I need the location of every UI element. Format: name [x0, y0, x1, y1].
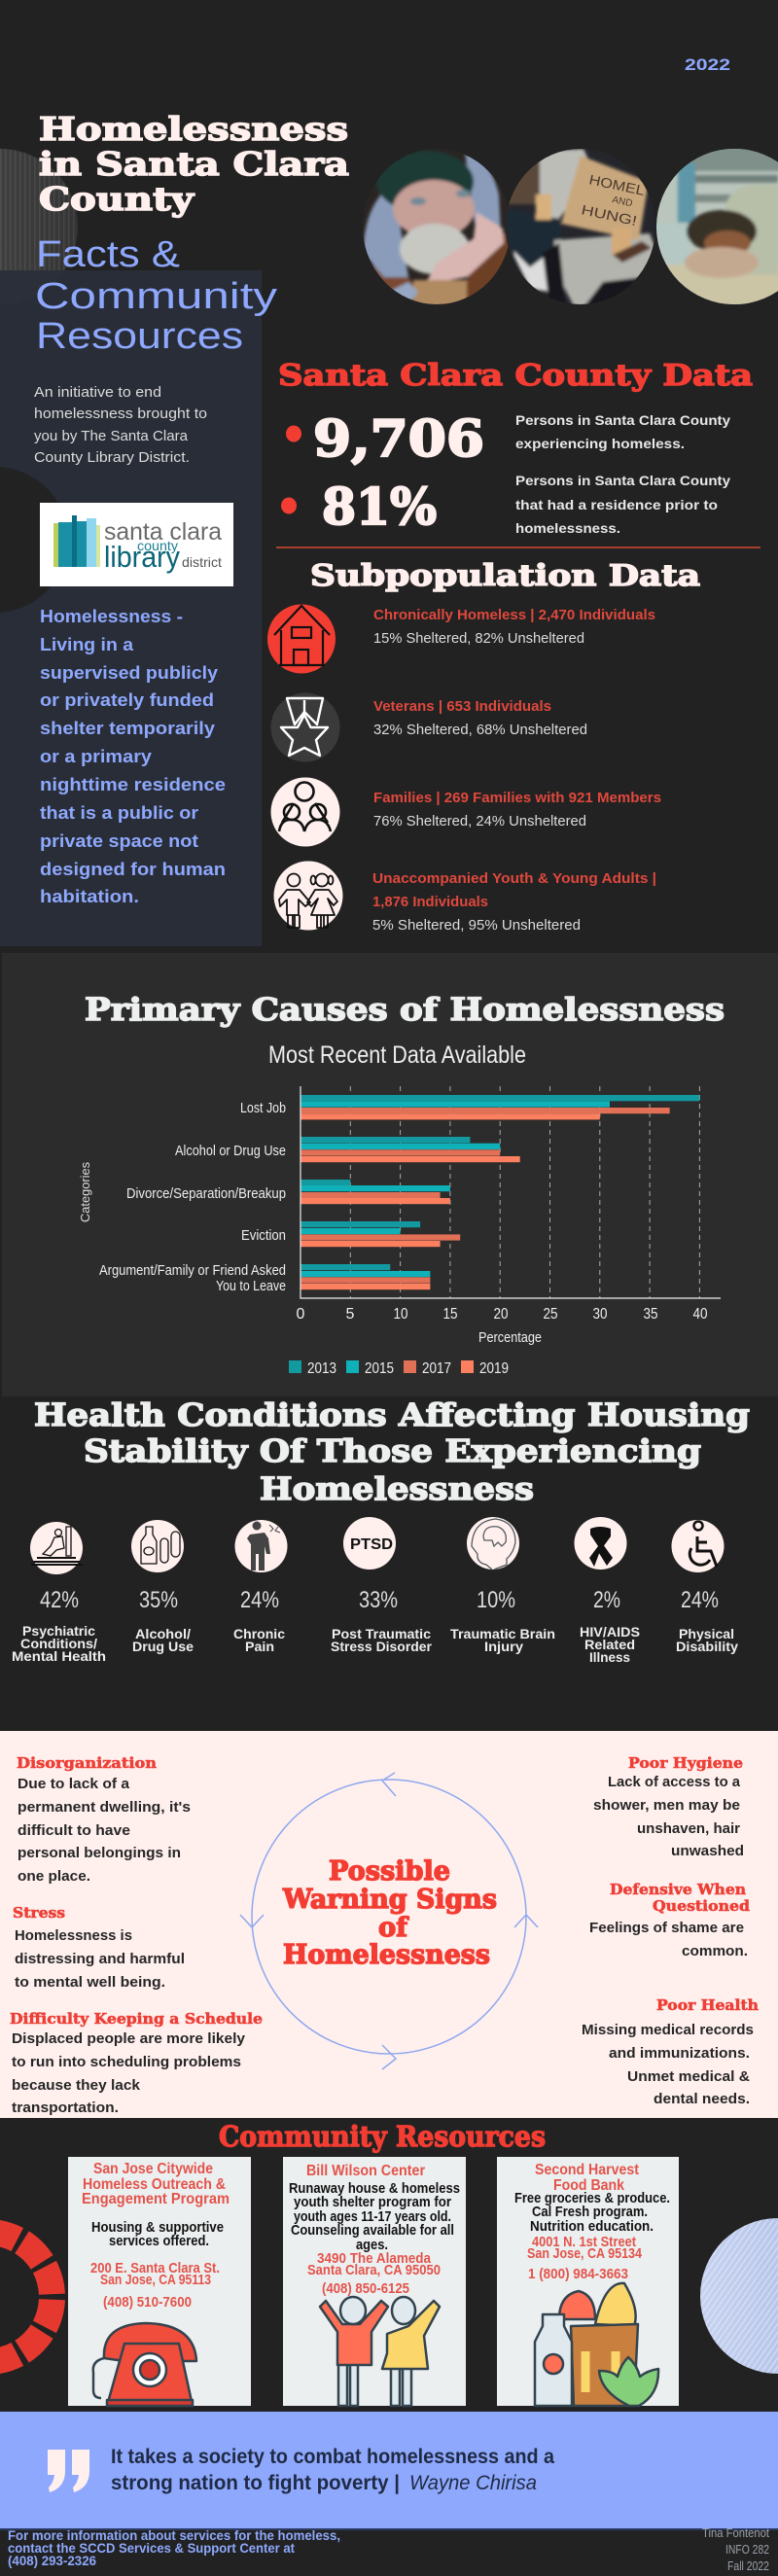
sign: poor hygiene: shower, men may be	[593, 1797, 740, 1814]
label: HIV/AIDS	[580, 1624, 640, 1640]
intro text: homelessness brought to	[34, 406, 207, 422]
icon: groceries	[535, 2283, 658, 2406]
subpopulation: veterans: 32% Sheltered, 68% Unsheltered	[373, 723, 587, 738]
photo: person sleeping	[652, 146, 778, 307]
footer contact: contact the SCCD Services & Support Center at	[8, 2540, 295, 2556]
label	[12, 1623, 106, 1664]
label: Mental Health	[12, 1648, 106, 1664]
health: chronic pain	[233, 1520, 288, 1654]
icon: bottle and pills	[131, 1520, 184, 1572]
health: PTSD	[331, 1517, 433, 1654]
sign: poor health: Unmet medical &	[627, 2068, 750, 2085]
definition of homelessness: private space not	[40, 830, 198, 851]
card description	[289, 2180, 460, 2253]
card title: Food Bank	[553, 2177, 624, 2194]
heading: Subpopulation Data: Subpopulation Data	[310, 559, 700, 593]
stat: 9,706: 9,706	[313, 410, 484, 469]
bar chart: 0	[297, 1306, 305, 1323]
label	[450, 1626, 555, 1654]
value 42%: 42%	[40, 1587, 79, 1613]
chart legend: 2019	[479, 1360, 509, 1377]
quote text: It takes a society to combat homelessness and a	[111, 2446, 554, 2468]
label: Post Traumatic	[332, 1626, 431, 1641]
footer credits: Tina Fontenot	[702, 2526, 769, 2540]
subtitle: Community	[35, 276, 277, 317]
bar chart: Categories	[78, 1162, 92, 1222]
value 35%: 35%	[139, 1587, 178, 1613]
label: Traumatic Brain	[450, 1626, 555, 1641]
health: brain injury	[450, 1517, 555, 1654]
photo: person holding sign: AND	[611, 194, 633, 209]
icon: red telephone	[93, 2323, 196, 2406]
year label: 2022	[685, 55, 730, 74]
logo: library district: santa clara	[104, 518, 222, 546]
decorative gray circle	[0, 149, 78, 304]
card: Second Harvest Food Bank	[497, 2157, 679, 2406]
sign: difficulty keeping a schedule: Difficulty Keeping a Schedule	[10, 2010, 263, 2028]
photo: person holding sign: HOMEL	[587, 171, 647, 198]
stat: 9,706	[286, 410, 730, 469]
sign: stress	[13, 1904, 185, 1991]
logo: library district: county	[137, 538, 178, 553]
definition of homelessness: Living in a	[40, 634, 134, 654]
subpopulation: unaccompanied youth	[372, 871, 656, 934]
label	[132, 1626, 194, 1654]
chart subtitle: Most Recent Data Available	[268, 1041, 526, 1069]
heading: health conditions: Stability Of Those Experiencing	[84, 1432, 701, 1469]
stat: 9,706: experiencing homeless.	[515, 436, 685, 451]
subpopulation: families	[373, 791, 661, 829]
sign: disorganization	[17, 1754, 191, 1885]
decorative red segmented ring	[0, 2233, 53, 2361]
sign: poor hygiene	[593, 1754, 744, 1859]
value 33%: 33%	[359, 1587, 398, 1613]
sign: stress: distressing and harmful	[15, 1951, 185, 1967]
chart legend: 2015	[365, 1360, 394, 1377]
center title: Warning Signs	[282, 1885, 497, 1915]
card address	[307, 2250, 441, 2297]
main title: in Santa Clara	[39, 145, 349, 183]
footer contact: (408) 293-2326	[8, 2553, 96, 2568]
bar chart: You to Leave	[216, 1278, 286, 1294]
center title: of	[378, 1913, 409, 1943]
card description: ages.	[356, 2237, 388, 2253]
decorative dark circle	[0, 467, 68, 613]
label: Pain	[245, 1639, 274, 1654]
footer contact: For more information about services for the homeless,	[8, 2527, 340, 2543]
bar chart: Alcohol or Drug Use	[175, 1143, 286, 1159]
quote text: strong nation to fight poverty |	[111, 2472, 400, 2494]
main title	[39, 110, 349, 218]
label: Disability	[676, 1639, 738, 1654]
quote banner	[0, 2412, 778, 2528]
definition of homelessness: designed for human	[40, 859, 226, 879]
card title: Engagement Program	[82, 2191, 230, 2207]
subtitle: Facts &	[36, 234, 180, 275]
panel: warning signs	[0, 1731, 778, 2118]
heading: health conditions: Health Conditions Affecting Housing	[34, 1396, 750, 1433]
sign: disorganization: one place.	[18, 1868, 90, 1885]
subpopulation: veterans: Veterans | 653 Individuals	[373, 699, 551, 715]
sign: defensive when questioned: Questioned	[653, 1897, 751, 1915]
subpopulation: veterans	[373, 699, 587, 738]
definition of homelessness: that is a public or	[40, 802, 198, 823]
definition of homelessness: or a primary	[40, 746, 153, 766]
card address	[90, 2260, 220, 2311]
label: Illness	[589, 1649, 630, 1665]
sign: difficulty keeping a schedule: because they lack	[12, 2077, 141, 2094]
label: Psychiatric	[22, 1623, 95, 1639]
bar chart: 40	[692, 1306, 708, 1323]
label: Physical	[679, 1626, 734, 1641]
icon: two children with raised arms	[320, 2297, 440, 2406]
stat: 81%: Persons in Santa Clara County	[515, 473, 730, 488]
stat: 81%: homelessness.	[515, 520, 620, 536]
card title: Bill Wilson Center	[306, 2163, 425, 2179]
sign: poor hygiene: Poor Hygiene	[628, 1754, 743, 1772]
sign: difficulty keeping a schedule: to run into scheduling problems	[12, 2054, 241, 2070]
definition of homelessness	[40, 606, 226, 906]
subpopulation: families: 76% Sheltered, 24% Unsheltered	[373, 814, 586, 829]
sign: stress: Homelessness is	[15, 1927, 132, 1944]
sign: poor health: Poor Health	[656, 1996, 759, 2014]
subpopulation: chronically homeless	[373, 608, 655, 647]
card address: (408) 850-6125	[322, 2280, 409, 2297]
sign: disorganization: permanent dwelling, it's	[18, 1799, 191, 1816]
stat: 81%: that had a residence prior to	[515, 497, 718, 512]
footer credits: Fall 2022	[727, 2559, 769, 2573]
main title: County	[39, 180, 194, 218]
label: Related	[584, 1637, 635, 1652]
photo: elderly man	[363, 150, 508, 304]
definition of homelessness: Homelessness -	[40, 606, 183, 626]
heading: community resources: Community Resources	[219, 2120, 546, 2153]
sign: stress: to mental well being.	[15, 1974, 165, 1991]
sign: poor hygiene: unshaven, hair	[637, 1820, 740, 1837]
sign: defensive when questioned: common.	[682, 1943, 748, 1959]
card description	[91, 2219, 224, 2249]
icon: house	[267, 605, 336, 673]
sign: disorganization: difficult to have	[18, 1822, 130, 1839]
icon: two children	[274, 862, 342, 930]
card description: Nutrition education.	[530, 2218, 654, 2235]
photo: person holding sign	[504, 146, 661, 307]
card address: 3490 The Alameda	[317, 2250, 432, 2267]
icon: ribbon	[574, 1517, 626, 1570]
card title: Second Harvest	[535, 2162, 640, 2178]
health: HIV/AIDS	[574, 1517, 640, 1665]
bar chart: 15	[443, 1306, 458, 1323]
sign: difficulty keeping a schedule	[10, 2010, 263, 2116]
decorative pale circle	[700, 2218, 778, 2374]
panel: causes chart	[2, 953, 778, 1396]
subpopulation: chronically homeless: Chronically Homeless | 2,470 Individuals	[373, 608, 655, 623]
label: Conditions/	[20, 1636, 97, 1651]
icon: PTSD badge: PTSD	[350, 1536, 393, 1553]
quote text: Wayne Chirisa	[409, 2472, 537, 2494]
sign: poor hygiene: unwashed	[671, 1843, 744, 1859]
intro text	[34, 384, 207, 466]
photo: person holding sign: HUNG!	[580, 201, 638, 229]
card description: Cal Fresh program.	[532, 2204, 648, 2220]
card title	[82, 2161, 230, 2207]
bar chart: Lost Job	[240, 1100, 286, 1116]
center title: Possible	[329, 1856, 450, 1887]
definition of homelessness: habitation.	[40, 886, 139, 906]
subpopulation: families: Families | 269 Families with 921 Members	[373, 791, 661, 806]
bar chart: 25	[543, 1306, 558, 1323]
card title: San Jose Citywide	[93, 2161, 213, 2177]
card: Bill Wilson Center	[283, 2157, 466, 2406]
card title	[535, 2162, 640, 2194]
card description: Housing & supportive	[91, 2219, 224, 2236]
sign: poor health: and immunizations.	[609, 2045, 750, 2062]
card address: San Jose, CA 95113	[100, 2272, 211, 2288]
value 10%: 10%	[477, 1587, 515, 1613]
sign: defensive when questioned	[589, 1881, 751, 1959]
footer credits	[702, 2526, 769, 2573]
icon: head with brain	[467, 1517, 519, 1570]
stat: 81%: 81%	[322, 478, 437, 537]
bar chart: Percentage	[478, 1329, 542, 1346]
sign: poor hygiene: Lack of access to a	[608, 1774, 741, 1790]
bar chart: 35	[644, 1306, 658, 1323]
bar chart: Argument/Family or Friend Asked	[99, 1262, 286, 1279]
definition of homelessness: or privately funded	[40, 689, 214, 710]
card address: San Jose, CA 95134	[527, 2245, 643, 2262]
heading: health conditions: Homelessness	[260, 1470, 534, 1507]
logo: library district	[40, 503, 233, 586]
label: Drug Use	[132, 1639, 194, 1654]
cycle circle with arrows	[240, 1773, 538, 2069]
sign: poor health: Missing medical records	[582, 2022, 754, 2038]
sign: disorganization: personal belongings in	[18, 1845, 181, 1861]
label: Stress Disorder	[331, 1639, 433, 1654]
value 24%: 24%	[681, 1587, 719, 1613]
card: San Jose outreach	[68, 2157, 251, 2406]
main title: Homelessness	[39, 110, 348, 148]
bar chart: 20	[494, 1306, 509, 1323]
intro text: An initiative to end	[34, 384, 161, 401]
icon: family	[270, 778, 340, 846]
subpopulation: unaccompanied youth: 1,876 Individuals	[372, 895, 488, 910]
card title: Homeless Outreach &	[83, 2176, 226, 2193]
card address	[527, 2234, 643, 2282]
logo: library district: library	[104, 540, 180, 574]
sign: defensive when questioned: Defensive When	[610, 1881, 746, 1898]
icon: person in pain	[235, 1520, 288, 1572]
label: Chronic	[233, 1626, 285, 1641]
card description: Free groceries & produce.	[514, 2190, 670, 2206]
sign: poor health: dental needs.	[654, 2091, 750, 2107]
card description: services offered.	[109, 2233, 209, 2249]
label	[233, 1626, 285, 1654]
icon: PTSD badge	[343, 1517, 396, 1570]
heading: health conditions	[34, 1396, 750, 1507]
bar chart	[78, 1086, 721, 1346]
card address: (408) 510-7600	[103, 2294, 192, 2311]
value 24%: 24%	[240, 1587, 279, 1613]
center title: Homelessness	[283, 1940, 490, 1970]
label: Alcohol/	[135, 1626, 191, 1641]
icon: quotation mark	[48, 2450, 89, 2492]
label: Injury	[484, 1639, 523, 1654]
chart legend: 2013	[307, 1360, 336, 1377]
label	[580, 1624, 640, 1665]
sign: poor health	[582, 1996, 759, 2107]
card address: 200 E. Santa Clara St.	[90, 2260, 220, 2276]
health: psychiatric	[12, 1522, 106, 1664]
subtitle	[35, 234, 277, 357]
card description: youth shelter program for	[294, 2194, 451, 2210]
bar chart: Eviction	[241, 1227, 286, 1244]
center title	[282, 1856, 497, 1970]
left intro panel	[0, 270, 262, 946]
chart legend: 2017	[422, 1360, 451, 1377]
logo: library district: district	[182, 554, 222, 570]
intro text: you by The Santa Clara	[34, 428, 189, 444]
chart legend	[289, 1360, 509, 1377]
label	[331, 1626, 433, 1654]
label	[676, 1626, 738, 1654]
definition of homelessness: shelter temporarily	[40, 718, 216, 738]
subpopulation: unaccompanied youth: Unaccompanied Youth & Young Adults |	[372, 871, 656, 887]
icon: medal	[270, 692, 340, 762]
sign: defensive when questioned: Feelings of shame are	[589, 1920, 744, 1936]
health: alcohol and drugs	[131, 1520, 194, 1654]
subtitle: Resources	[36, 316, 243, 357]
footer credits: INFO 282	[725, 2543, 769, 2557]
bar chart: 5	[346, 1306, 355, 1323]
bar chart: Divorce/Separation/Breakup	[126, 1185, 286, 1202]
stat: 81%	[281, 473, 730, 537]
stat: 9,706: Persons in Santa Clara County	[515, 412, 730, 428]
sign: disorganization: Disorganization	[17, 1754, 157, 1772]
definition of homelessness: supervised publicly	[40, 662, 219, 683]
card address: 4001 N. 1st Street	[532, 2234, 636, 2250]
card address: 1 (800) 984-3663	[528, 2266, 628, 2282]
subpopulation: unaccompanied youth: 5% Sheltered, 95% Unsheltered	[372, 918, 581, 934]
bar chart: 30	[593, 1306, 608, 1323]
sign: difficulty keeping a schedule: Displaced people are more likely	[12, 2030, 246, 2047]
health: physical disability	[671, 1520, 738, 1654]
intro text: County Library District.	[34, 449, 190, 466]
heading: primary causes: Primary Causes of Homelessness	[85, 991, 725, 1028]
footer contact	[8, 2527, 340, 2568]
sign: disorganization: Due to lack of a	[18, 1776, 130, 1792]
card description: youth ages 11-17 years old.	[294, 2208, 451, 2225]
subpopulation: chronically homeless: 15% Sheltered, 82% Unsheltered	[373, 631, 584, 647]
definition of homelessness: nighttime residence	[40, 774, 226, 794]
icon: person sitting on steps	[30, 1522, 83, 1574]
card description	[514, 2190, 670, 2235]
value 2%: 2%	[593, 1587, 620, 1613]
card description: Runaway house & homeless	[289, 2180, 460, 2197]
bar chart: 10	[393, 1306, 408, 1323]
icon: wheelchair	[671, 1520, 724, 1572]
sign: difficulty keeping a schedule: transportation.	[12, 2100, 119, 2116]
sign: stress: Stress	[13, 1904, 65, 1922]
heading: Santa Clara County Data: Santa Clara County Data	[278, 359, 753, 393]
card address: Santa Clara, CA 95050	[307, 2262, 441, 2278]
card description: Counseling available for all	[291, 2222, 454, 2239]
quote text	[111, 2446, 554, 2494]
